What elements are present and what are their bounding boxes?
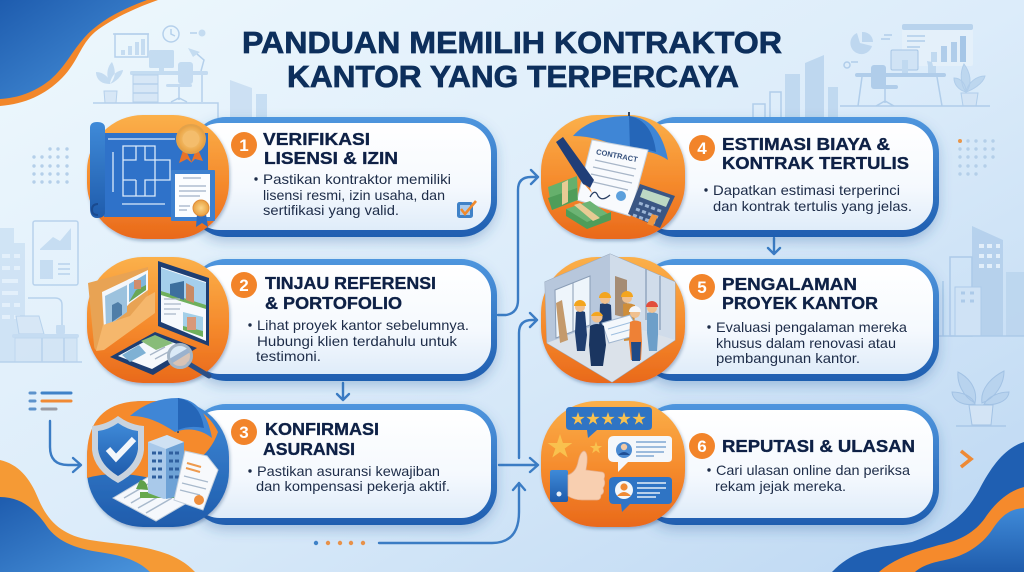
- icon badge: team in office room: [541, 254, 685, 383]
- card frame: [640, 117, 939, 237]
- body text: Cari ulasan online dan periksa: [716, 462, 910, 478]
- body text: rekam jejak mereka.: [715, 478, 846, 494]
- heading: KONFIRMASI: [265, 419, 379, 439]
- step number: [231, 419, 257, 445]
- body text: Pastikan asuransi kewajiban: [257, 463, 440, 479]
- arrow: bottom line up to step 6: [379, 483, 525, 543]
- arrow: step 4 to step 5: [768, 238, 780, 254]
- decoration: top-left office desk: [93, 26, 267, 118]
- card frame: [190, 259, 497, 381]
- step number: [231, 272, 257, 298]
- arrow: step 2 to step 3: [337, 383, 349, 400]
- step number: 3: [239, 423, 249, 442]
- heading: & PORTOFOLIO: [265, 293, 402, 313]
- body text: dan kontrak tertulis yang jelas.: [713, 198, 912, 214]
- card frame: [190, 117, 497, 237]
- arrow: step 3 to step 5: [519, 313, 537, 458]
- decoration: right city: [936, 226, 1024, 336]
- card frame: [190, 404, 497, 525]
- body text: Hubungi klien terdahulu untuk: [257, 333, 458, 349]
- heading: PROYEK KANTOR: [722, 293, 878, 313]
- title: [242, 25, 782, 94]
- arrow: step 3 to step 6: [499, 458, 538, 472]
- heading: ASURANSI: [263, 439, 355, 459]
- icon: list lines: [30, 393, 71, 409]
- body text: pembangunan kantor.: [716, 350, 860, 366]
- heading: [265, 273, 436, 313]
- heading: [263, 129, 398, 168]
- decoration: bottom-left wave: [0, 460, 195, 572]
- icon badge: blueprint and certificate: [87, 115, 229, 239]
- panel: step 4: [541, 112, 939, 239]
- arrow: list to step 3: [50, 421, 81, 472]
- panel: step 6: [541, 401, 939, 527]
- body text: [704, 182, 912, 214]
- body text: lisensi resmi, izin usaha, dan: [263, 187, 445, 203]
- icon: right chevron: [961, 451, 971, 467]
- heading: [263, 419, 379, 459]
- icon badge: contract, money and calculator: CONTRACT: [595, 147, 639, 164]
- decoration: bottom dots: [314, 541, 365, 545]
- body text: Lihat proyek kantor sebelumnya.: [257, 317, 469, 333]
- icon badge: shield, building and umbrella: [87, 398, 229, 527]
- heading: VERIFIKASI: [263, 129, 370, 149]
- card frame: [640, 259, 939, 381]
- step number: [231, 132, 257, 158]
- step number: 6: [697, 437, 707, 456]
- panel: step 1: [87, 115, 497, 239]
- step number: [689, 433, 715, 459]
- decoration: dot grids: [32, 139, 995, 184]
- card frame: [640, 404, 939, 525]
- step number: 2: [239, 276, 249, 295]
- body text: [248, 463, 450, 494]
- heading: [722, 274, 878, 313]
- heading: LISENSI & IZIN: [264, 148, 398, 168]
- panel: step 3: [87, 398, 497, 527]
- body text: khusus dalam renovasi atau: [716, 335, 896, 351]
- icon badge: contract, money and calculator: [541, 112, 685, 239]
- body text: [707, 319, 907, 366]
- icon badge: reviews and thumbs up: [541, 401, 685, 527]
- body text: testimoni.: [256, 348, 321, 364]
- body text: Evaluasi pengalaman mereka: [716, 319, 907, 335]
- step number: 1: [239, 136, 249, 155]
- icon badge: folder and tablets: [87, 257, 229, 383]
- step number: 5: [697, 278, 707, 297]
- body text: [248, 317, 469, 364]
- heading: REPUTASI & ULASAN: [722, 436, 915, 456]
- step number: [689, 274, 715, 300]
- step number: [689, 135, 715, 161]
- body text: Dapatkan estimasi terperinci: [713, 182, 900, 198]
- body text: dan kompensasi pekerja aktif.: [256, 478, 450, 494]
- body text: sertifikasi yang valid.: [263, 202, 399, 218]
- step number: 4: [697, 139, 707, 158]
- decoration: bottom-right plant: [952, 371, 1009, 426]
- heading: [722, 134, 909, 173]
- heading: TINJAU REFERENSI: [265, 273, 436, 293]
- panel: step 2: [87, 257, 497, 383]
- arrow: step 2 to step 4: [498, 170, 538, 315]
- decoration: top-left wave: [0, 0, 158, 106]
- heading: PENGALAMAN: [722, 274, 857, 294]
- heading: ESTIMASI BIAYA &: [722, 134, 890, 154]
- decoration: bottom-right wave: [832, 442, 1024, 572]
- title: KANTOR YANG TERPERCAYA: [287, 59, 739, 94]
- body text: [254, 171, 451, 218]
- title: PANDUAN MEMILIH KONTRAKTOR: [242, 25, 782, 60]
- icon: checkbox: [457, 201, 476, 218]
- decoration: top-right office desk: [753, 24, 990, 118]
- body text: [707, 462, 910, 494]
- body text: Pastikan kontraktor memiliki: [263, 171, 451, 187]
- decoration: left city and chart: [0, 221, 82, 362]
- heading: KONTRAK TERTULIS: [722, 153, 909, 173]
- panel: step 5: [541, 254, 939, 383]
